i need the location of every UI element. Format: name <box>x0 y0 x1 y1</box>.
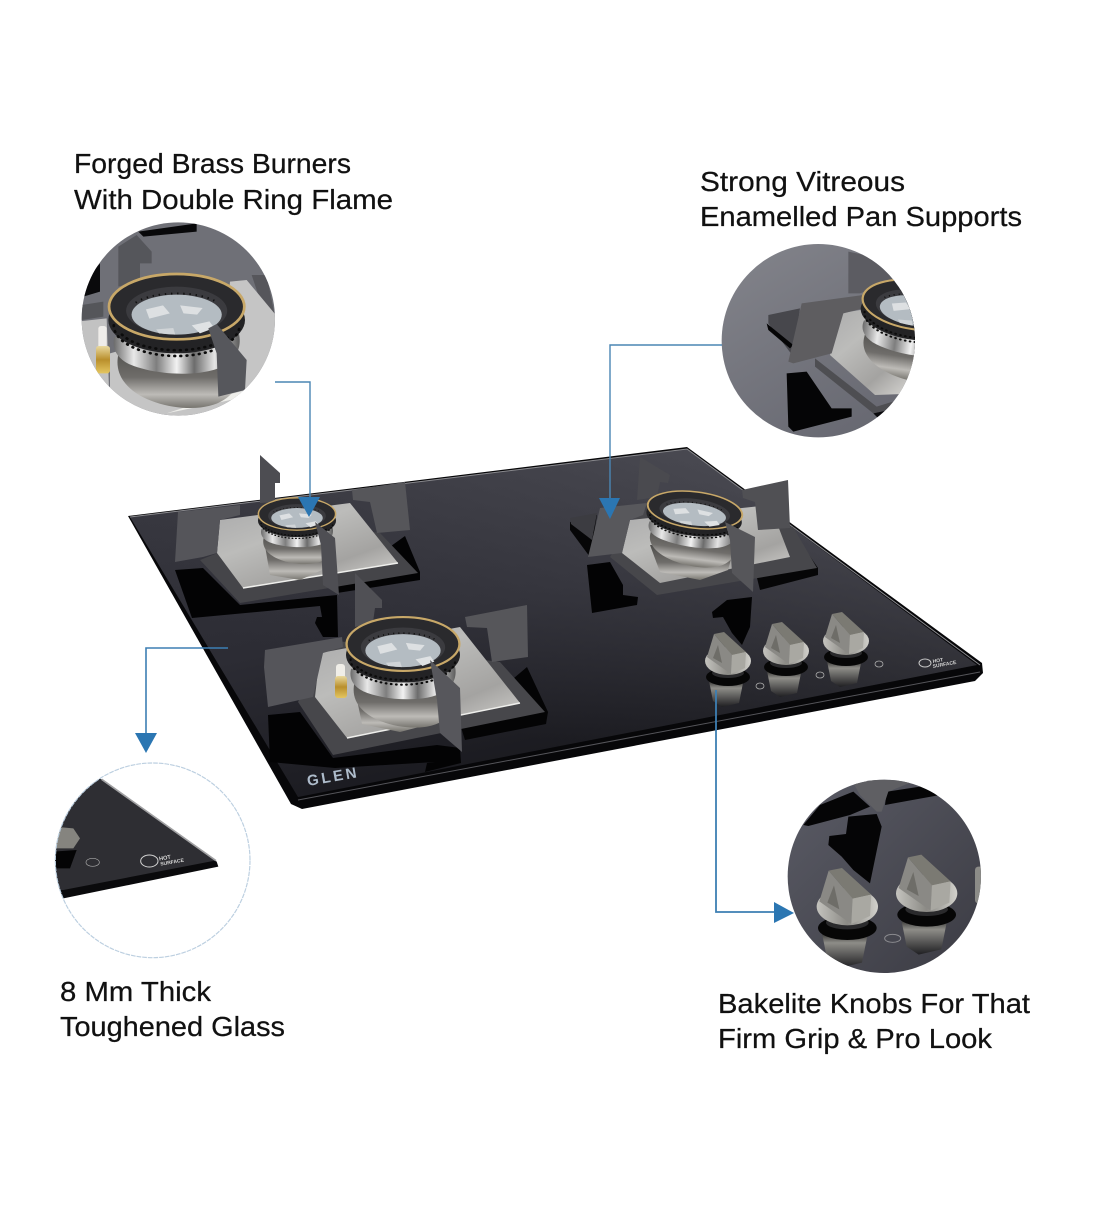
arrow: knobs <box>774 902 794 923</box>
heading: burners: Forged Brass Burners <box>74 148 351 179</box>
igniter <box>335 664 347 698</box>
heading: glass: Toughened Glass <box>60 1011 285 1042</box>
connector line: pan supports <box>610 345 722 500</box>
heading: glass: 8 Mm Thick <box>60 976 212 1007</box>
arrow: pan supports <box>599 498 620 519</box>
heading: pan supports: Strong Vitreous <box>700 166 905 197</box>
burner back left <box>175 455 420 637</box>
brand logo: GLEN: GLEN <box>306 765 358 790</box>
detail circle: glass corner: SURFACE <box>160 857 185 868</box>
hot surface marking <box>919 657 958 670</box>
heading: knobs <box>718 988 1030 1054</box>
hot surface marking: HOT <box>932 657 944 665</box>
glass cooktop <box>128 447 983 809</box>
detail circle: pan support <box>722 244 915 438</box>
connector line: knobs <box>716 690 775 912</box>
detail circle: glass corner <box>50 763 250 958</box>
callout: pan supports <box>599 166 1022 519</box>
heading: knobs: Bakelite Knobs For That <box>718 988 1030 1019</box>
detail circle: knobs <box>783 777 987 980</box>
heading: burners <box>74 148 393 215</box>
burner front <box>264 573 548 772</box>
heading: knobs: Firm Grip & Pro Look <box>718 1023 993 1054</box>
control knobs <box>705 612 883 707</box>
callout: bakelite knobs <box>716 690 1030 1054</box>
callout: forged brass burners <box>74 148 393 517</box>
detail circle: glass corner: HOT <box>159 855 172 863</box>
arrow: glass <box>135 733 157 753</box>
heading: glass <box>60 976 285 1042</box>
arrow: burners <box>298 497 320 517</box>
detail circle: burner <box>77 220 283 420</box>
heading: pan supports: Enamelled Pan Supports <box>700 201 1022 232</box>
callout: toughened glass <box>50 648 285 1042</box>
heading: pan supports <box>700 166 1022 232</box>
burner back right <box>570 457 818 645</box>
hot surface marking: SURFACE <box>932 660 958 670</box>
connector line: burners <box>275 382 310 498</box>
connector line: glass <box>146 648 228 735</box>
heading: burners: With Double Ring Flame <box>74 184 393 215</box>
gas hob product <box>128 447 983 809</box>
